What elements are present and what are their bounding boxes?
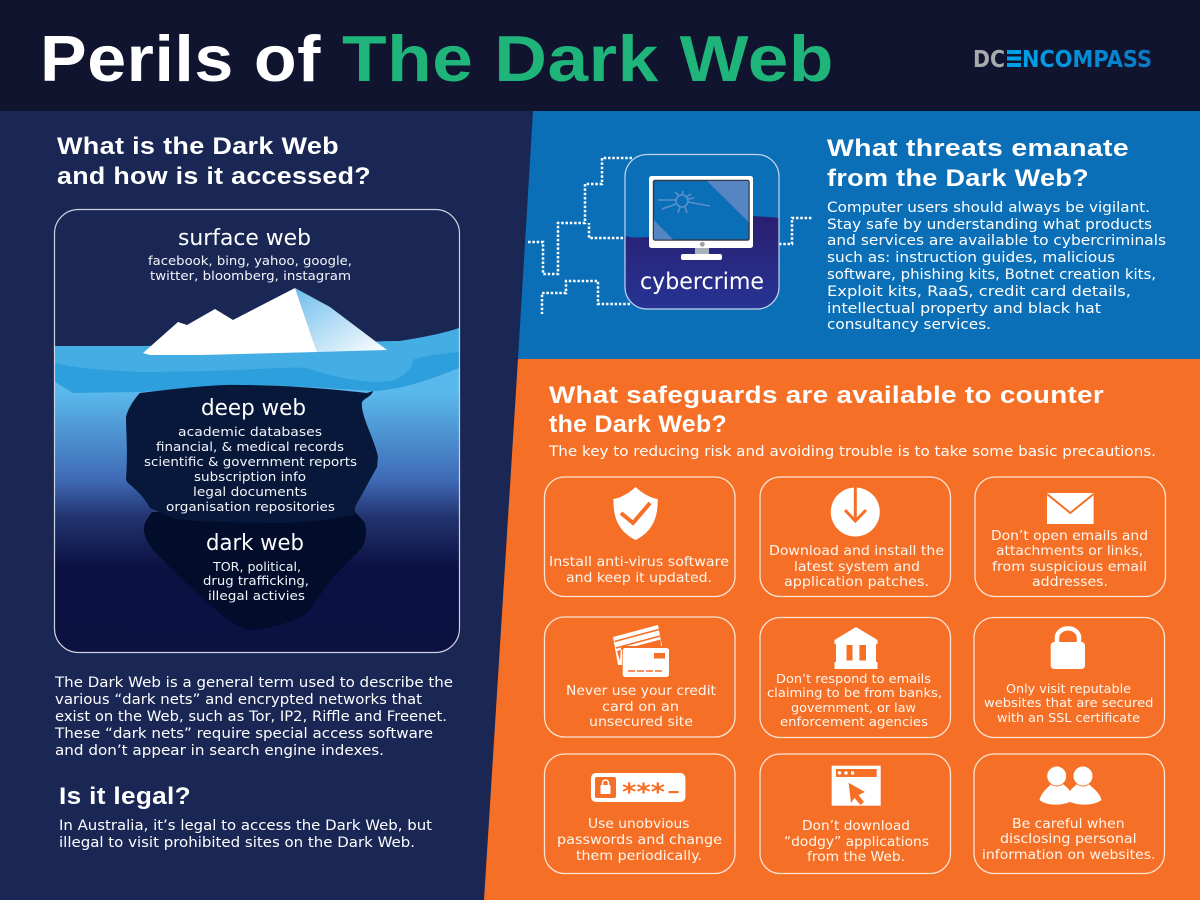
label: deep web: organisation repositories <box>166 499 335 514</box>
icon: download <box>831 487 880 536</box>
logo: DC Encompass: DC <box>973 47 1005 73</box>
icon: password field <box>591 773 685 806</box>
card: dodgy applications: from the Web. <box>807 849 905 865</box>
card: personal information: information on websites. <box>982 847 1156 863</box>
title: The Dark Web <box>342 22 834 95</box>
text: dark web description: exist on the Web, such as Tor, IP2, Riffle and Freenet. <box>55 709 447 725</box>
card: emails: attachments or links, <box>996 543 1143 559</box>
card: credit card: Never use your credit <box>566 683 716 699</box>
card: patches: Download and install the <box>769 543 944 559</box>
heading: threats: What threats emanate <box>827 135 1129 162</box>
text: threats description: consultancy services. <box>827 317 991 333</box>
card: personal information <box>974 754 1164 874</box>
label: deep web: academic databases <box>178 424 322 439</box>
icon: people <box>1040 766 1102 805</box>
card: banks: enforcement agencies <box>780 714 928 729</box>
card: dodgy applications: Don’t download <box>802 818 910 834</box>
label: surface web: twitter, bloomberg, instagram <box>150 268 351 283</box>
card: emails: from suspicious email <box>992 559 1147 575</box>
iceberg tip shadow face <box>295 288 387 352</box>
card: patches: application patches. <box>784 574 929 590</box>
card: personal information: Be careful when <box>1012 816 1125 832</box>
label: deep web: financial, & medical records <box>156 439 344 454</box>
heading: threats: from the Dark Web? <box>827 165 1089 192</box>
label: deep web: subscription info <box>194 469 306 484</box>
card: ssl: Only visit reputable <box>1006 681 1131 696</box>
text: threats description: Computer users should always be vigilant. <box>827 200 1150 216</box>
text: threats description: and services are available to cybercriminals <box>827 233 1166 249</box>
logo: DC Encompass: NCOMPASS <box>1022 47 1152 73</box>
text: dark web description: The Dark Web is a general term used to describe the <box>54 675 453 691</box>
card: passwords <box>544 754 735 874</box>
heading: safeguards <box>549 382 1104 438</box>
card: emails: addresses. <box>1032 574 1108 590</box>
heading: safeguards: the Dark Web? <box>549 411 727 438</box>
text: dark web description <box>54 675 453 759</box>
card: banks <box>760 618 950 738</box>
card: emails: Don’t open emails and <box>991 528 1148 544</box>
card: ssl: with an SSL certificate <box>997 710 1140 725</box>
icon: cracked monitor <box>649 176 753 260</box>
cybercrime badge <box>625 154 779 309</box>
card: dodgy applications: “dodgy” applications <box>784 834 929 850</box>
icon: shield <box>613 487 658 540</box>
card: banks: government, or law <box>791 700 916 715</box>
heading: what is the dark web: and how is it accessed? <box>57 163 371 190</box>
card: passwords: them periodically. <box>576 848 702 864</box>
card: anti-virus: and keep it updated. <box>566 570 712 586</box>
card: anti-virus <box>544 477 735 596</box>
card: banks: Don’t respond to emails <box>776 671 931 686</box>
title: Perils of <box>40 22 321 95</box>
card: credit card: card on an <box>602 699 679 715</box>
card: anti-virus: Install anti-virus software <box>549 554 729 570</box>
panel: iceberg diagram <box>54 210 460 652</box>
text: legality: illegal to visit prohibited sites on the Dark Web. <box>59 835 415 851</box>
card: credit card: unsecured site <box>589 714 693 730</box>
text: threats description: Stay safe by understanding what products <box>827 217 1152 233</box>
icon: bank <box>834 627 878 669</box>
card: passwords: Use unobvious <box>588 816 690 832</box>
text: safeguards intro: The key to reducing risk and avoiding trouble is to take some basic precautions. <box>548 444 1156 460</box>
card: credit card <box>544 617 735 737</box>
iceberg tip <box>143 288 317 355</box>
card: personal information: disclosing personal <box>1000 831 1137 847</box>
label: deep web: scientific & government reports <box>144 454 357 469</box>
text: threats description: intellectual property and black hat <box>827 301 1102 317</box>
label: surface web: surface web <box>178 226 311 251</box>
label: surface web <box>148 226 352 283</box>
icon: padlock <box>1051 628 1085 669</box>
heading: what is the dark web: What is the Dark Web <box>57 133 339 160</box>
card: patches <box>760 477 950 596</box>
text: legality: In Australia, it’s legal to access the Dark Web, but <box>59 818 433 834</box>
label: surface web: facebook, bing, yahoo, google, <box>148 253 352 268</box>
iceberg: dark web base <box>144 512 366 630</box>
text: threats description <box>827 200 1166 333</box>
icon: envelope <box>1047 493 1094 524</box>
water surface <box>55 328 459 393</box>
card: patches: latest system and <box>794 559 920 575</box>
label: dark web: TOR, political, <box>212 559 301 574</box>
dotted network lines <box>527 158 813 314</box>
card: ssl: websites that are secured <box>984 695 1154 710</box>
label: deep web: deep web <box>201 396 306 421</box>
text: threats description: Exploit kits, RaaS, credit card details, <box>827 284 1131 300</box>
icon: browser cursor <box>832 766 881 806</box>
heading: threats <box>827 135 1129 192</box>
panel: safeguards background <box>484 359 1200 900</box>
label: dark web: illegal activies <box>208 588 305 603</box>
icon: password field: *** <box>622 778 666 806</box>
label: dark web: drug trafficking, <box>203 573 309 588</box>
iceberg border <box>54 210 460 652</box>
header band <box>0 0 1200 111</box>
text: dark web description: These “dark nets” require special access software <box>54 726 433 742</box>
card: banks: claiming to be from banks, <box>767 685 942 700</box>
icon: credit cards <box>613 625 669 677</box>
label: deep web: legal documents <box>193 484 307 499</box>
logo: DC Encompass <box>973 47 1152 73</box>
iceberg: deep web mass <box>126 385 378 523</box>
water highlight <box>55 328 459 382</box>
text: dark web description: various “dark nets” and encrypted networks that <box>55 692 423 708</box>
card: emails <box>975 477 1166 596</box>
label: dark web: dark web <box>206 531 304 556</box>
label: dark web <box>203 531 309 603</box>
label: cybercrime: cybercrime <box>640 269 764 295</box>
text: dark web description: and don’t appear in search engine indexes. <box>55 743 384 759</box>
heading: is it legal: Is it legal? <box>59 783 191 810</box>
heading: safeguards: What safeguards are available to counter <box>549 382 1104 409</box>
heading: what is the dark web <box>57 133 371 190</box>
text: threats description: such as: instruction guides, malicious <box>827 250 1115 266</box>
card: ssl <box>974 618 1164 738</box>
text: threats description: software, phishing kits, Botnet creation kits, <box>827 267 1156 283</box>
card: dodgy applications <box>760 754 950 874</box>
card: passwords: passwords and change <box>557 832 722 848</box>
panel: threats background <box>518 111 1200 359</box>
title <box>40 22 834 95</box>
deep sea gradient <box>55 360 459 652</box>
text: legality <box>59 818 433 851</box>
label: deep web <box>144 396 357 514</box>
